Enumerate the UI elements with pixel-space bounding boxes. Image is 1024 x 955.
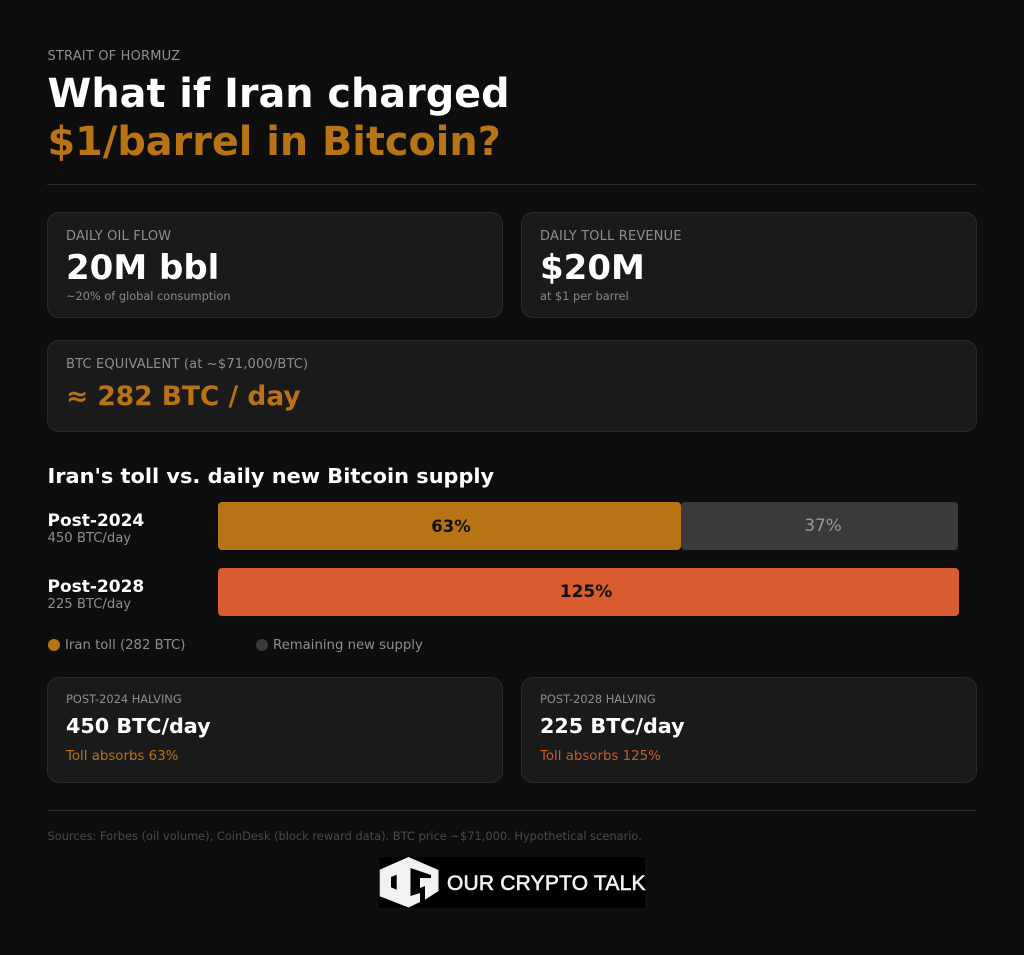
row label: Post-2028: Post-2028 bbox=[48, 577, 144, 597]
bar: toll 125% bbox=[218, 568, 959, 616]
bar: toll 63% bbox=[218, 502, 681, 550]
value: $20M bbox=[540, 248, 645, 288]
value: 225 BTC/day bbox=[540, 714, 685, 738]
label: DAILY TOLL REVENUE bbox=[540, 229, 682, 244]
title bbox=[48, 71, 510, 165]
logo text: OUR CRYPTO TALK bbox=[447, 872, 646, 895]
bar: toll 125%: 125% bbox=[560, 582, 612, 602]
legend: remaining bbox=[256, 639, 268, 651]
logo bbox=[379, 857, 645, 908]
bar chart bbox=[48, 502, 959, 653]
panel: daily oil flow bbox=[47, 212, 503, 318]
panel: post-2028 halving bbox=[521, 677, 977, 783]
label: POST-2024 HALVING bbox=[66, 692, 182, 706]
legend: toll bbox=[48, 639, 60, 651]
label: DAILY OIL FLOW bbox=[66, 229, 171, 244]
eyebrow: STRAIT OF HORMUZ bbox=[48, 49, 180, 64]
row label: Post-2024: Post-2024 bbox=[48, 511, 144, 531]
note: Toll absorbs 125% bbox=[540, 749, 661, 764]
row sublabel: 225 BTC/day bbox=[48, 597, 131, 612]
sources: Sources: Forbes (oil volume), CoinDesk (block reward data). BTC price ~$71,000. Hypothetical scenario. bbox=[48, 829, 642, 843]
value: 20M bbl bbox=[66, 248, 219, 288]
title: What if Iran charged bbox=[48, 71, 510, 117]
note: ~20% of global consumption bbox=[66, 289, 231, 303]
note: at $1 per barrel bbox=[540, 289, 629, 303]
panel: daily toll revenue bbox=[521, 212, 977, 318]
row sublabel: 450 BTC/day bbox=[48, 531, 131, 546]
legend text: Remaining new supply bbox=[273, 638, 423, 653]
value: 450 BTC/day bbox=[66, 714, 211, 738]
chart heading: Iran's toll vs. daily new Bitcoin supply bbox=[48, 464, 494, 488]
value: ≈ 282 BTC / day bbox=[66, 381, 301, 412]
panel: post-2024 halving bbox=[47, 677, 503, 783]
legend text: Iran toll (282 BTC) bbox=[65, 638, 185, 653]
label: POST-2028 HALVING bbox=[540, 692, 656, 706]
bar: toll 63%: 63% bbox=[431, 516, 471, 536]
note: Toll absorbs 63% bbox=[66, 749, 178, 764]
panel: BTC equivalent bbox=[47, 340, 977, 432]
icon: logo hexagon bbox=[380, 857, 438, 908]
bar: remaining 37% bbox=[681, 502, 958, 550]
title: $1/barrel in Bitcoin? bbox=[48, 119, 501, 165]
label: BTC EQUIVALENT (at ~$71,000/BTC) bbox=[66, 357, 308, 372]
bar: remaining 37%: 37% bbox=[804, 515, 842, 535]
